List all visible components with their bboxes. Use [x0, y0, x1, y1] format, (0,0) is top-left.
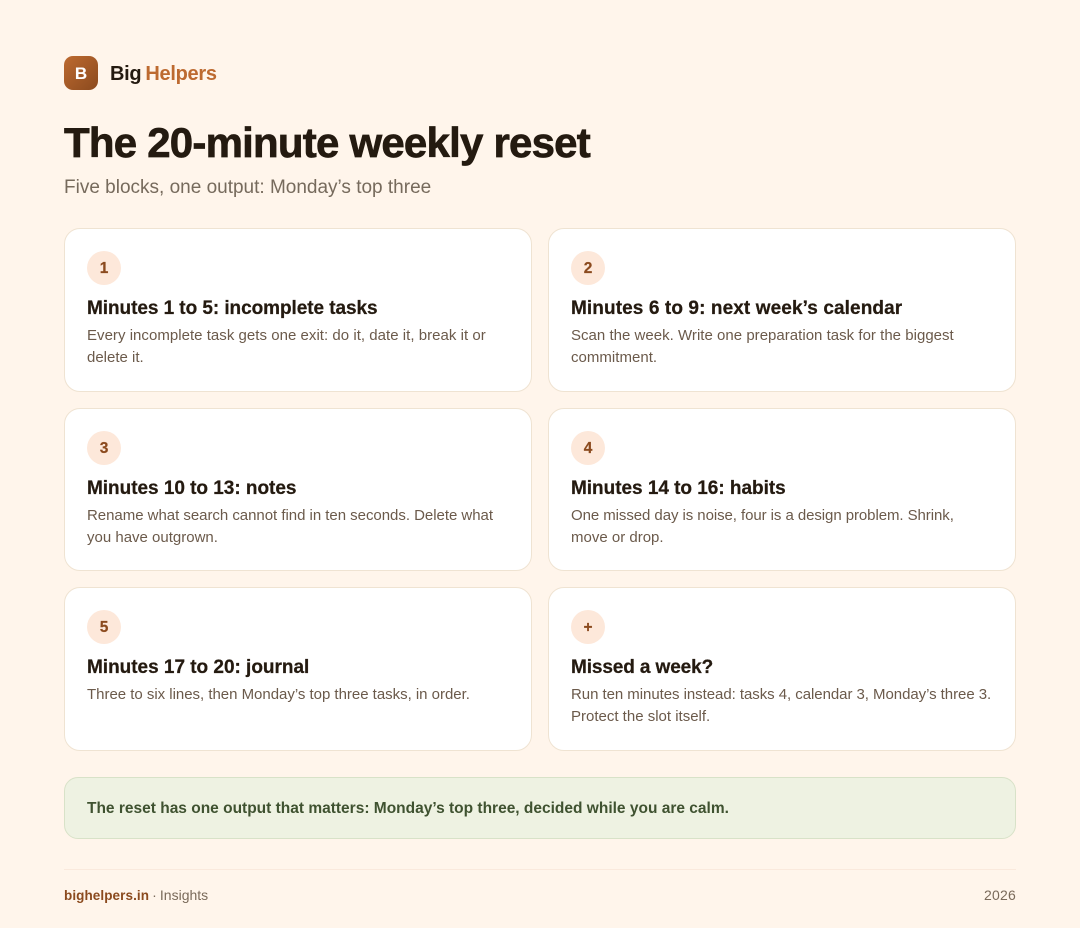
text: block 2: commitment.	[571, 349, 657, 366]
text: block 5: Three to six lines, then Monday’s top three tasks, in order.	[87, 686, 470, 703]
step number 3: 3	[100, 440, 108, 457]
heading: block 1: Minutes 1 to 5: incomplete tasks	[87, 298, 378, 319]
text: block 3: Rename what search cannot find in ten seconds. Delete what	[87, 507, 493, 524]
step number 4: 4	[584, 440, 592, 457]
text: block 1	[87, 327, 486, 366]
text: missed a week	[571, 686, 991, 725]
heading: block 5: Minutes 17 to 20: journal	[87, 657, 309, 678]
panel: block 2	[548, 228, 1016, 392]
heading: block 2: Minutes 6 to 9: next week’s calendar	[571, 298, 902, 319]
plus badge	[571, 610, 605, 644]
step number 1	[87, 251, 121, 285]
panel: missed a week	[548, 587, 1016, 751]
step number 5	[87, 610, 121, 644]
text: block 2: Scan the week. Write one preparation task for the biggest	[571, 327, 954, 344]
panel: block 3	[64, 408, 532, 571]
text: missed a week: Protect the slot itself.	[571, 708, 710, 725]
step number 1: 1	[100, 260, 108, 277]
plus badge: +	[583, 619, 593, 636]
text: block 4	[571, 507, 954, 546]
text: block 4: move or drop.	[571, 529, 664, 546]
panel: block 5	[64, 587, 532, 751]
brand name: Big Helpers	[110, 63, 217, 85]
panel: block 1	[64, 228, 532, 392]
footer	[64, 869, 1016, 910]
text: block 3	[87, 507, 493, 546]
step number 3	[87, 431, 121, 465]
heading: block 3: Minutes 10 to 13: notes	[87, 478, 296, 499]
panel: block 4	[548, 408, 1016, 571]
footer source: bighelpers.in · Insights	[64, 887, 208, 903]
title: The 20-minute weekly reset	[64, 119, 590, 166]
step number 4	[571, 431, 605, 465]
step number 2: 2	[584, 260, 592, 277]
text: block 1: Every incomplete task gets one exit: do it, date it, break it or	[87, 327, 486, 344]
icon: B badge: B	[75, 64, 87, 83]
footer year: 2026	[984, 887, 1016, 903]
callout: key takeaway	[64, 777, 1016, 839]
icon: B badge	[64, 56, 98, 90]
text: block 3: you have outgrown.	[87, 529, 218, 546]
text: block 4: One missed day is noise, four is a design problem. Shrink,	[571, 507, 954, 524]
callout text: The reset has one output that matters: Monday’s top three, decided while you are calm.	[87, 800, 729, 817]
heading: block 4: Minutes 14 to 16: habits	[571, 478, 786, 499]
logo: Big Helpers	[64, 56, 217, 90]
text: block 1: delete it.	[87, 349, 144, 366]
text: block 2	[571, 327, 954, 366]
subtitle: Five blocks, one output: Monday’s top three	[64, 177, 431, 198]
step number 5: 5	[100, 619, 108, 636]
text: missed a week: Run ten minutes instead: tasks 4, calendar 3, Monday’s three 3.	[571, 686, 991, 703]
step number 2	[571, 251, 605, 285]
heading: missed a week: Missed a week?	[571, 657, 713, 678]
